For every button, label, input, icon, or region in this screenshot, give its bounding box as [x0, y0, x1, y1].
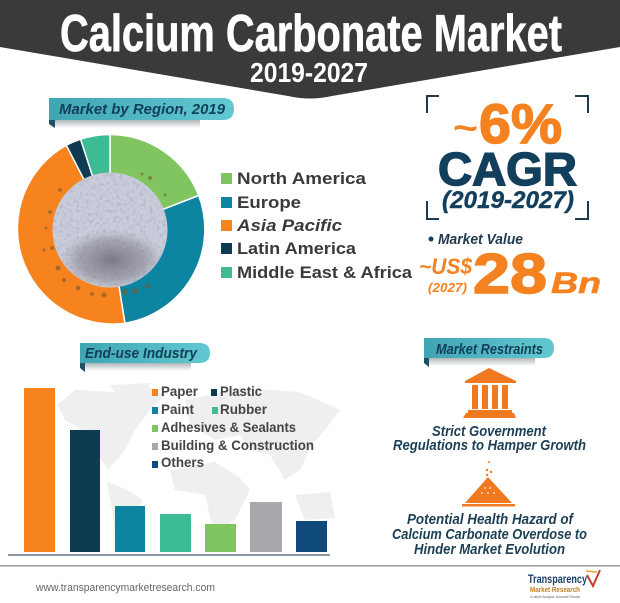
region legend: Europe	[237, 193, 301, 212]
industry legend: Rubber	[220, 401, 268, 417]
region legend	[221, 169, 413, 282]
restraint text: health hazard: Calcium Carbonate Overdose to	[392, 526, 587, 543]
logo: Market Research	[530, 585, 580, 594]
industry legend: Building & Construction	[161, 437, 314, 453]
panel: end-use industry	[8, 343, 340, 556]
panel: market value	[419, 231, 601, 306]
restraint text: health hazard	[392, 511, 587, 558]
world map background	[57, 383, 340, 541]
panel: market by region	[17, 98, 413, 324]
restraint text: health hazard: Hinder Market Evolution	[414, 541, 565, 558]
icon: government building	[463, 368, 516, 418]
footer	[0, 565, 620, 599]
restraint text: regulations: Regulations to Hamper Growth	[393, 437, 586, 454]
restraint text: regulations	[393, 423, 586, 454]
region legend: Asia Pacific	[236, 216, 343, 235]
ribbon heading: end-use industry: End-use Industry	[85, 345, 198, 362]
value number: 28	[473, 242, 547, 306]
donut chart	[17, 134, 205, 324]
region legend: Latin America	[237, 239, 357, 258]
industry legend: Adhesives & Sealants	[161, 419, 296, 435]
calcium carbonate powder image	[42, 172, 168, 298]
ribbon heading: market by region: Market by Region, 2019	[59, 101, 226, 118]
panel: CAGR	[427, 92, 588, 219]
subtitle years: 2019-2027	[250, 57, 368, 88]
restraint text: health hazard: Potential Health Hazard of	[407, 511, 575, 528]
logo: In-depth Analysis. Accurate Results	[530, 595, 580, 599]
logo: Transparency	[528, 574, 587, 586]
ribbon heading: end-use industry	[80, 343, 210, 372]
currency prefix: ~US$	[419, 254, 473, 279]
industry legend: Paper	[161, 383, 199, 399]
industry legend: Paint	[161, 401, 194, 417]
CAGR percentage: ~	[453, 107, 478, 148]
region legend: Middle East & Africa	[237, 263, 413, 282]
industry legend: Others	[161, 454, 204, 470]
ribbon heading: market by region	[49, 98, 234, 128]
restraint text: regulations: Strict Government	[432, 423, 547, 440]
market value label: Market Value	[438, 231, 523, 248]
CAGR period: (2019-2027)	[442, 187, 574, 214]
website url: www.transparencymarketresearch.com	[35, 582, 215, 594]
ribbon heading: market restraints: Market Restraints	[436, 341, 543, 358]
header banner	[0, 0, 620, 98]
value unit: Bn	[551, 267, 601, 300]
panel: market restraints	[392, 338, 587, 558]
corner brackets	[427, 96, 588, 219]
icon: powder pile	[462, 461, 515, 506]
logo	[528, 570, 600, 599]
industry legend: Plastic	[220, 383, 262, 399]
bar chart	[8, 388, 330, 556]
value year: (2027)	[428, 280, 467, 295]
CAGR label: CAGR	[438, 143, 577, 195]
industry legend	[152, 383, 314, 470]
CAGR percentage: 6%	[479, 92, 562, 155]
ribbon heading: market restraints	[424, 338, 554, 367]
region legend: North America	[237, 169, 367, 188]
